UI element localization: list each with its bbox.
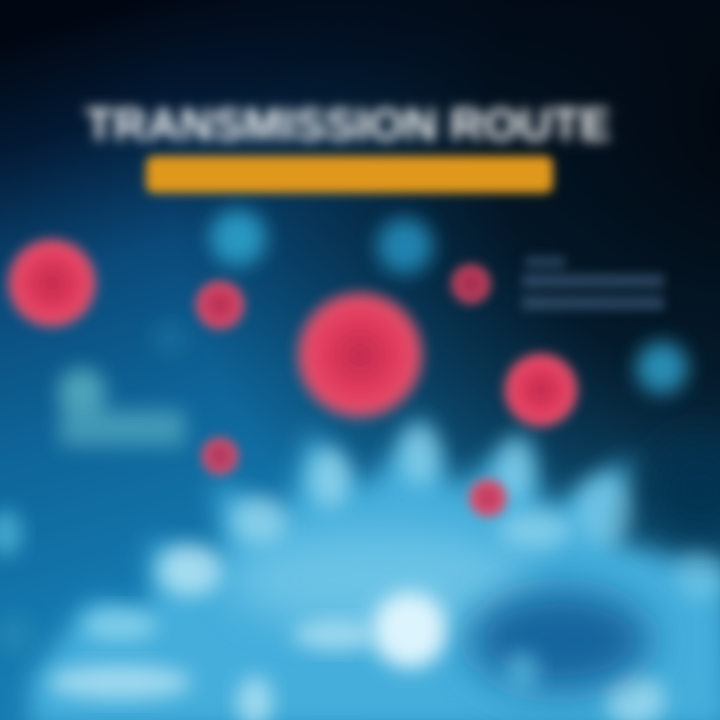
- blurred label: right: [522, 256, 664, 310]
- virus: small lower left: [199, 435, 241, 477]
- burst: pale blue spiky shape: [0, 415, 720, 720]
- virus: small lower right: [467, 477, 509, 519]
- virus: small top right: [449, 262, 493, 306]
- title: blurred white text: TRANSMISSION ROUTE: [86, 99, 610, 150]
- virus: small left: [193, 278, 247, 332]
- virus: right: [501, 350, 581, 430]
- virus: large centre: [292, 287, 428, 423]
- blue particle: faint left: [152, 320, 188, 356]
- blurred label: left: [58, 368, 185, 446]
- blue particle: top left: [210, 210, 266, 266]
- virus: large left: [4, 235, 100, 331]
- blue particle: right: [636, 342, 688, 394]
- subtitle bar: orange: [146, 156, 553, 193]
- blue particle: top centre: [377, 218, 433, 274]
